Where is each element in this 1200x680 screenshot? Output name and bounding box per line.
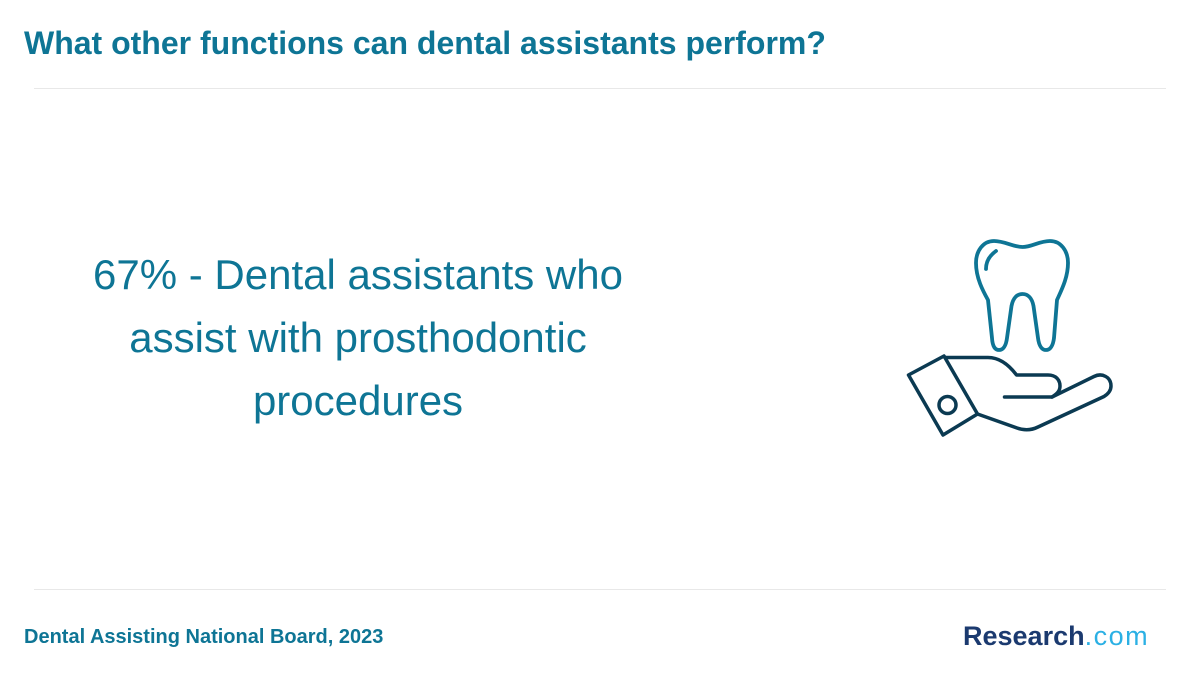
logo: Research.com: Research.com bbox=[963, 621, 1149, 651]
icon: hand and cuff bbox=[908, 356, 1111, 435]
main statistic text: procedures bbox=[253, 377, 463, 424]
main statistic text: 67% - Dental assistants who bbox=[93, 251, 623, 298]
title: What other functions can dental assistants perform? bbox=[24, 25, 826, 61]
main statistic text bbox=[93, 251, 623, 424]
icon: tooth bbox=[976, 241, 1068, 350]
source: Dental Assisting National Board, 2023 bbox=[24, 626, 383, 648]
icon: hand holding tooth bbox=[906, 239, 1113, 437]
main statistic text: assist with prosthodontic bbox=[129, 314, 587, 361]
